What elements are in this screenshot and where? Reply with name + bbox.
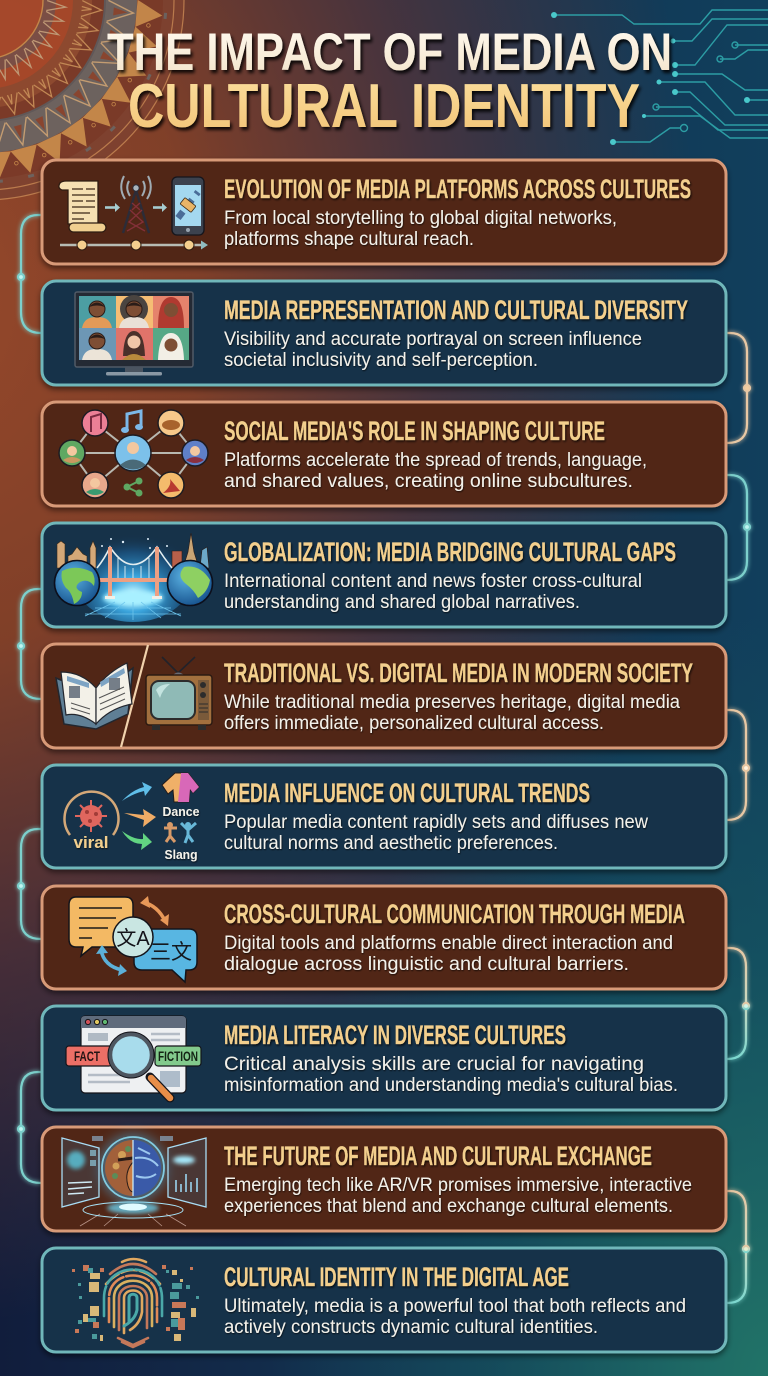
- connector: card 1 to 2: [18, 215, 41, 333]
- text block: dialogue across linguistic and cultural barriers.: [224, 954, 629, 975]
- panel: traditional vs digital: [42, 644, 726, 748]
- text block: platforms shape cultural reach.: [224, 229, 474, 250]
- icon: pixelated fingerprint: [72, 1259, 199, 1347]
- text block: offers immediate, personalized cultural access.: [224, 713, 604, 734]
- text block: International content and news foster cross-cultural: [224, 571, 642, 592]
- text block: [224, 812, 648, 854]
- text block: [224, 692, 680, 734]
- icon: fact vs fiction magnifier: FACT: [74, 1048, 100, 1064]
- decorative mandala: [0, 0, 184, 200]
- icon: social network graph: [59, 410, 208, 498]
- panel: future of media: [42, 1127, 726, 1231]
- icon: viral spread: [65, 773, 200, 862]
- connector: card 3 to 4: [727, 475, 750, 580]
- icon: translation speech bubbles: 文A: [116, 927, 150, 950]
- text block: From local storytelling to global digital networks,: [224, 208, 617, 229]
- panel: media representation: [42, 281, 726, 385]
- text block: [224, 571, 642, 613]
- panel: cultural identity: [42, 1248, 726, 1352]
- text block: [224, 329, 642, 371]
- panel: evolution of media platforms: [42, 160, 726, 264]
- connector: card 9 to 10: [727, 1191, 749, 1303]
- connector: card 4 to 5: [18, 589, 41, 699]
- text block: [224, 208, 617, 250]
- icon: bridge between globes: [54, 522, 212, 622]
- text block: Popular media content rapidly sets and diffuses new: [224, 812, 648, 833]
- text block: While traditional media preserves heritage, digital media: [224, 692, 680, 713]
- text block: experiences that blend and exchange cultural elements.: [224, 1196, 673, 1217]
- icon: viral spread: Dance: [162, 804, 200, 819]
- panel: social media: [42, 402, 726, 506]
- connector: card 7 to 8: [727, 948, 749, 1059]
- connector: card 6 to 7: [18, 829, 41, 939]
- text block: Emerging tech like AR/VR promises immersive, interactive: [224, 1175, 692, 1196]
- text block: Platforms accelerate the spread of trends, language,: [224, 450, 647, 471]
- heading: MEDIA LITERACY IN DIVERSE CULTURES: [224, 1020, 566, 1050]
- icon: viral spread: Slang: [164, 847, 198, 862]
- text block: misinformation and understanding media's cultural bias.: [224, 1075, 678, 1096]
- icon: translation speech bubbles: 三文: [150, 941, 192, 964]
- text block: societal inclusivity and self-perception.: [224, 350, 538, 371]
- title: [107, 23, 672, 141]
- connector: card 8 to 9: [18, 1072, 41, 1183]
- panel: globalization: [42, 522, 726, 627]
- icon: translation speech bubbles: [69, 896, 197, 982]
- icon: open book and retro TV: [56, 645, 212, 747]
- connector: card 5 to 6: [727, 710, 749, 820]
- icon: viral spread: viral: [74, 833, 108, 852]
- text block: Visibility and accurate portrayal on screen influence: [224, 329, 642, 350]
- panel: cross-cultural communication: [42, 886, 726, 989]
- icon: hologram globe: [62, 1134, 206, 1226]
- text block: Digital tools and platforms enable direct interaction and: [224, 933, 673, 954]
- connector: card 2 to 3: [727, 333, 750, 443]
- text block: [224, 1296, 686, 1338]
- icon: fact vs fiction magnifier: [66, 1016, 201, 1098]
- text block: understanding and shared global narratives.: [224, 592, 580, 613]
- panel: media literacy: [42, 1006, 726, 1110]
- heading: CULTURAL IDENTITY IN THE DIGITAL AGE: [224, 1262, 569, 1292]
- text block: Critical analysis skills are crucial for navigating: [224, 1054, 644, 1075]
- text block: [224, 450, 647, 492]
- icon: fact vs fiction magnifier: FICTION: [158, 1048, 198, 1064]
- panel: cultural trends: [42, 765, 726, 868]
- text block: actively constructs dynamic cultural identities.: [224, 1317, 598, 1338]
- title: CULTURAL IDENTITY: [128, 72, 640, 141]
- text block: cultural norms and aesthetic preferences.: [224, 833, 558, 854]
- text block: [224, 1054, 678, 1096]
- icon: scroll, tower and phone timeline: [59, 176, 208, 250]
- text block: [224, 1175, 692, 1217]
- decorative circuit traces: [551, 10, 768, 145]
- text block: Ultimately, media is a powerful tool that both reflects and: [224, 1296, 686, 1317]
- text block: and shared values, creating online subcultures.: [224, 471, 633, 492]
- text block: [224, 933, 673, 975]
- icon: TV with diverse faces: [75, 292, 193, 376]
